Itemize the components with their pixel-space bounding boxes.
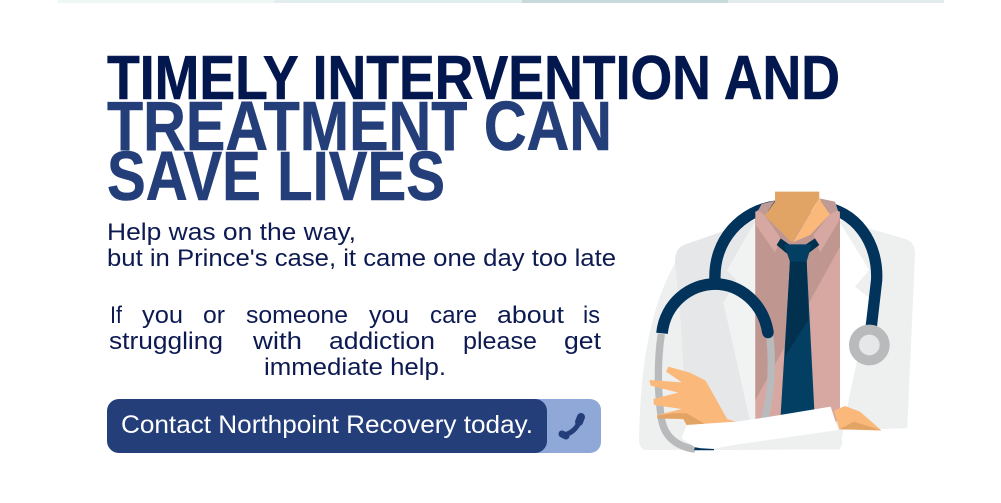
call to action text: immediate help. [264, 354, 446, 381]
title: TREATMENT CAN [107, 87, 612, 165]
call to action text: someone [246, 302, 348, 329]
call to action text: struggling [109, 328, 223, 355]
title: TIMELY INTERVENTION AND [107, 43, 840, 113]
call to action text: you [369, 302, 409, 329]
call to action text [109, 302, 601, 381]
stethoscope: neck tube [715, 206, 877, 327]
button label: Contact Northpoint Recovery today. [121, 411, 533, 439]
call to action text: is [583, 302, 600, 329]
call to action text: you [142, 302, 183, 329]
hand [649, 367, 737, 425]
chest piece [854, 330, 885, 360]
subheading [107, 219, 616, 272]
tie [781, 262, 814, 415]
call to action text: about [497, 302, 564, 329]
shirt [755, 212, 840, 422]
contact button [107, 399, 601, 453]
top colour strip [58, 0, 944, 3]
call to action text: please [463, 328, 537, 355]
call to action text: If [110, 302, 122, 329]
subheading: Help was on the way, [107, 219, 356, 246]
sleeve [682, 407, 843, 449]
call to action text: addiction [329, 328, 435, 355]
stethoscope [662, 284, 768, 333]
call to action text: or [203, 302, 225, 329]
call to action text: with [252, 328, 302, 355]
collar [756, 210, 781, 253]
subheading: but in Prince's case, it came one day too late [107, 245, 616, 272]
stethoscope tubes [658, 334, 695, 449]
neck [765, 192, 819, 242]
title: SAVE LIVES [107, 137, 445, 215]
coat [639, 220, 915, 450]
icon: phone [562, 417, 581, 436]
call to action text: care [430, 302, 477, 329]
call to action text: get [564, 328, 601, 355]
other hand [834, 406, 882, 431]
illustration: doctor [639, 192, 915, 450]
title [107, 43, 840, 215]
